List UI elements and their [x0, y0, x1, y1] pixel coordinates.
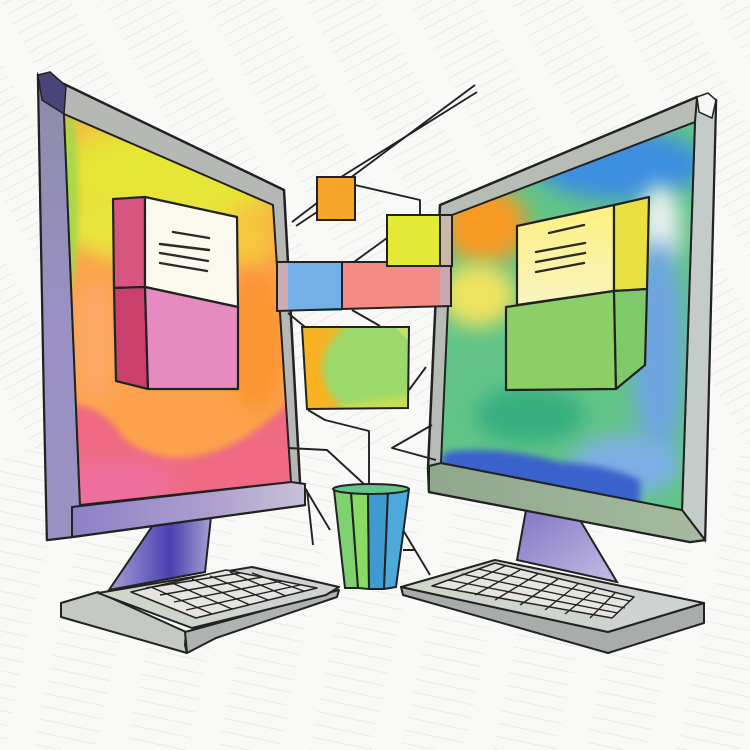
yellow square [387, 215, 452, 266]
right page text lines [536, 225, 585, 272]
blue bar segment [288, 262, 342, 311]
right stand [517, 510, 617, 582]
left keyboard top plate [98, 567, 339, 628]
bar outline [277, 262, 451, 311]
right bottom bezel [429, 463, 705, 542]
right panel white page [517, 205, 614, 305]
left keys [131, 570, 317, 618]
right panel yellow side [614, 197, 649, 291]
right document panel [506, 197, 649, 390]
left purple side bezel [38, 75, 80, 540]
left page text lines [160, 232, 209, 271]
right corner cap [697, 93, 716, 118]
left panel white page [145, 197, 238, 307]
right monitor [428, 93, 716, 582]
left panel lower side [114, 287, 148, 389]
left monitor [38, 72, 305, 590]
right panel green side [614, 289, 647, 389]
left corner cap [38, 72, 66, 114]
left panel pink side [113, 197, 145, 288]
bar left end [277, 262, 288, 311]
horizontal bar [277, 262, 451, 311]
left screen [65, 116, 290, 504]
left keyboard base [61, 592, 187, 653]
left panel pink block [145, 287, 238, 389]
left monitor frame [38, 75, 305, 540]
left document panel [113, 197, 238, 389]
right keyboard top [401, 560, 704, 632]
right keyboard front [401, 587, 704, 653]
cup [333, 484, 409, 589]
right keyboard [401, 560, 704, 653]
bar right end [440, 266, 451, 307]
left screen outline [64, 114, 291, 505]
right screen outline [441, 122, 695, 510]
right monitor frame [428, 97, 716, 542]
left bottom bezel [72, 482, 305, 537]
multicolor card [300, 325, 412, 412]
pink bar segment [342, 262, 440, 309]
right keys [432, 563, 634, 618]
left stand [109, 517, 211, 590]
orange square [317, 177, 355, 220]
left keyboard [61, 567, 339, 653]
right panel green front [506, 291, 616, 390]
connector lines [288, 85, 477, 575]
right screen [442, 124, 694, 509]
right side bezel [682, 97, 716, 540]
